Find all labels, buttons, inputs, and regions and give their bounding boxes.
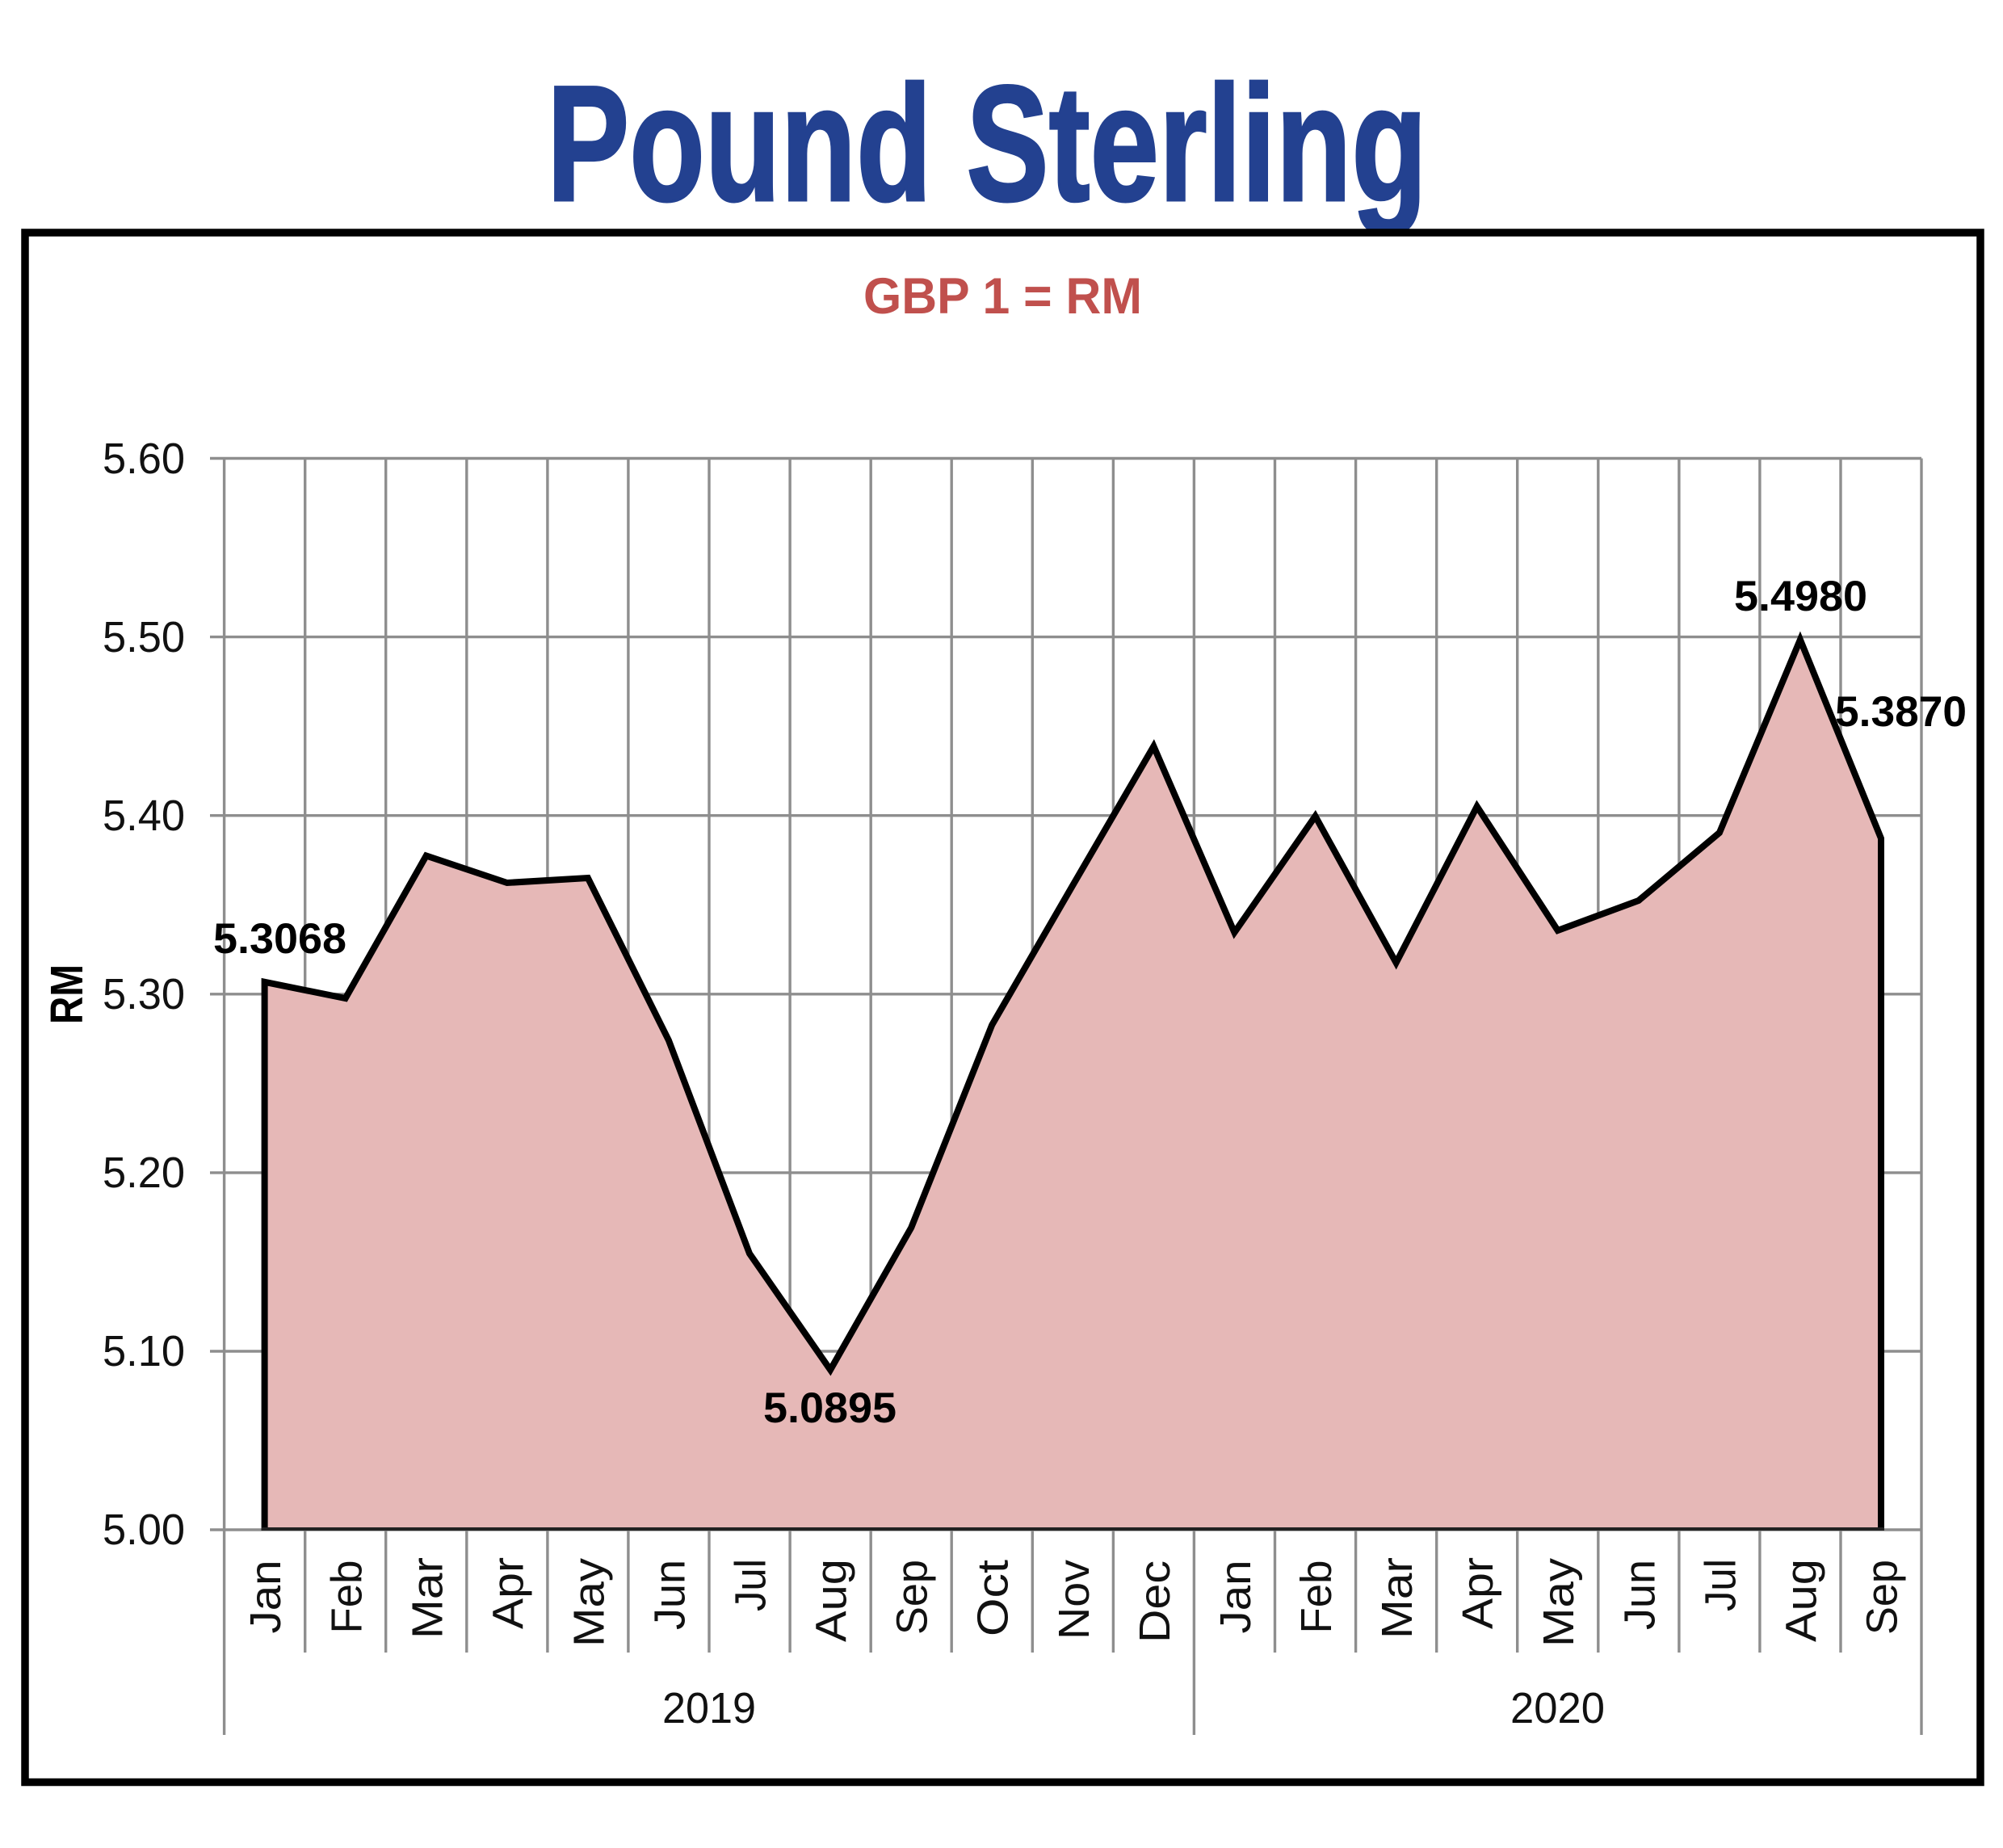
x axis year label: 2020: 2020 — [1510, 1684, 1605, 1732]
data label: Sep 2020: 5.3870 — [1835, 688, 1967, 736]
y axis labels: 5.60 — [103, 435, 185, 483]
title: Pound Sterling — [547, 52, 1427, 236]
x axis month labels: Jan — [241, 1560, 290, 1633]
x axis month labels: Jun — [1615, 1560, 1664, 1630]
x axis month labels: Sep — [888, 1560, 937, 1635]
x axis month labels: Aug — [1777, 1559, 1825, 1642]
area outline — [265, 640, 1881, 1531]
area chart: GBP to RM exchange rate — [262, 640, 1884, 1531]
y axis labels: 5.50 — [103, 613, 185, 662]
y axis labels — [103, 435, 185, 1554]
x axis month labels: May — [565, 1558, 614, 1647]
x axis month labels — [241, 1557, 1906, 1647]
data label: Jan 2019: 5.3068 — [213, 915, 346, 963]
x axis month labels: Sep — [1858, 1560, 1906, 1635]
x axis month labels: Jun — [646, 1560, 695, 1630]
y axis labels: 5.00 — [103, 1506, 185, 1554]
y axis labels: 5.20 — [103, 1149, 185, 1197]
x axis month labels: Feb — [323, 1560, 372, 1633]
x axis month labels: Jul — [727, 1559, 775, 1611]
x axis year label: 2019: 2019 — [662, 1684, 756, 1732]
y axis labels: 5.40 — [103, 792, 185, 840]
subtitle: GBP 1 = RM — [863, 268, 1142, 325]
x axis month labels: Jan — [1211, 1560, 1260, 1633]
y axis labels: 5.30 — [103, 970, 185, 1018]
y axis title: RM: RM — [41, 964, 93, 1024]
area baseline — [262, 1527, 1884, 1531]
data label: Aug 2019: 5.0895 — [763, 1384, 897, 1432]
area fill — [265, 640, 1881, 1529]
x axis month labels: Mar — [404, 1557, 452, 1639]
x axis month labels: Dec — [1131, 1560, 1179, 1643]
x axis month labels: Apr — [1454, 1557, 1502, 1629]
x axis month labels: Mar — [1373, 1557, 1421, 1639]
x axis month labels: Aug — [808, 1559, 856, 1642]
x axis month labels: Oct — [969, 1560, 1018, 1636]
x axis month labels: May — [1535, 1558, 1583, 1647]
x axis month labels: Jul — [1696, 1559, 1745, 1611]
x axis month labels: Nov — [1050, 1560, 1098, 1640]
data label: Aug 2020: 5.4980 — [1734, 573, 1867, 620]
x axis month labels: Feb — [1292, 1560, 1341, 1633]
y axis labels: 5.10 — [103, 1327, 185, 1376]
x axis month labels: Apr — [485, 1557, 533, 1629]
